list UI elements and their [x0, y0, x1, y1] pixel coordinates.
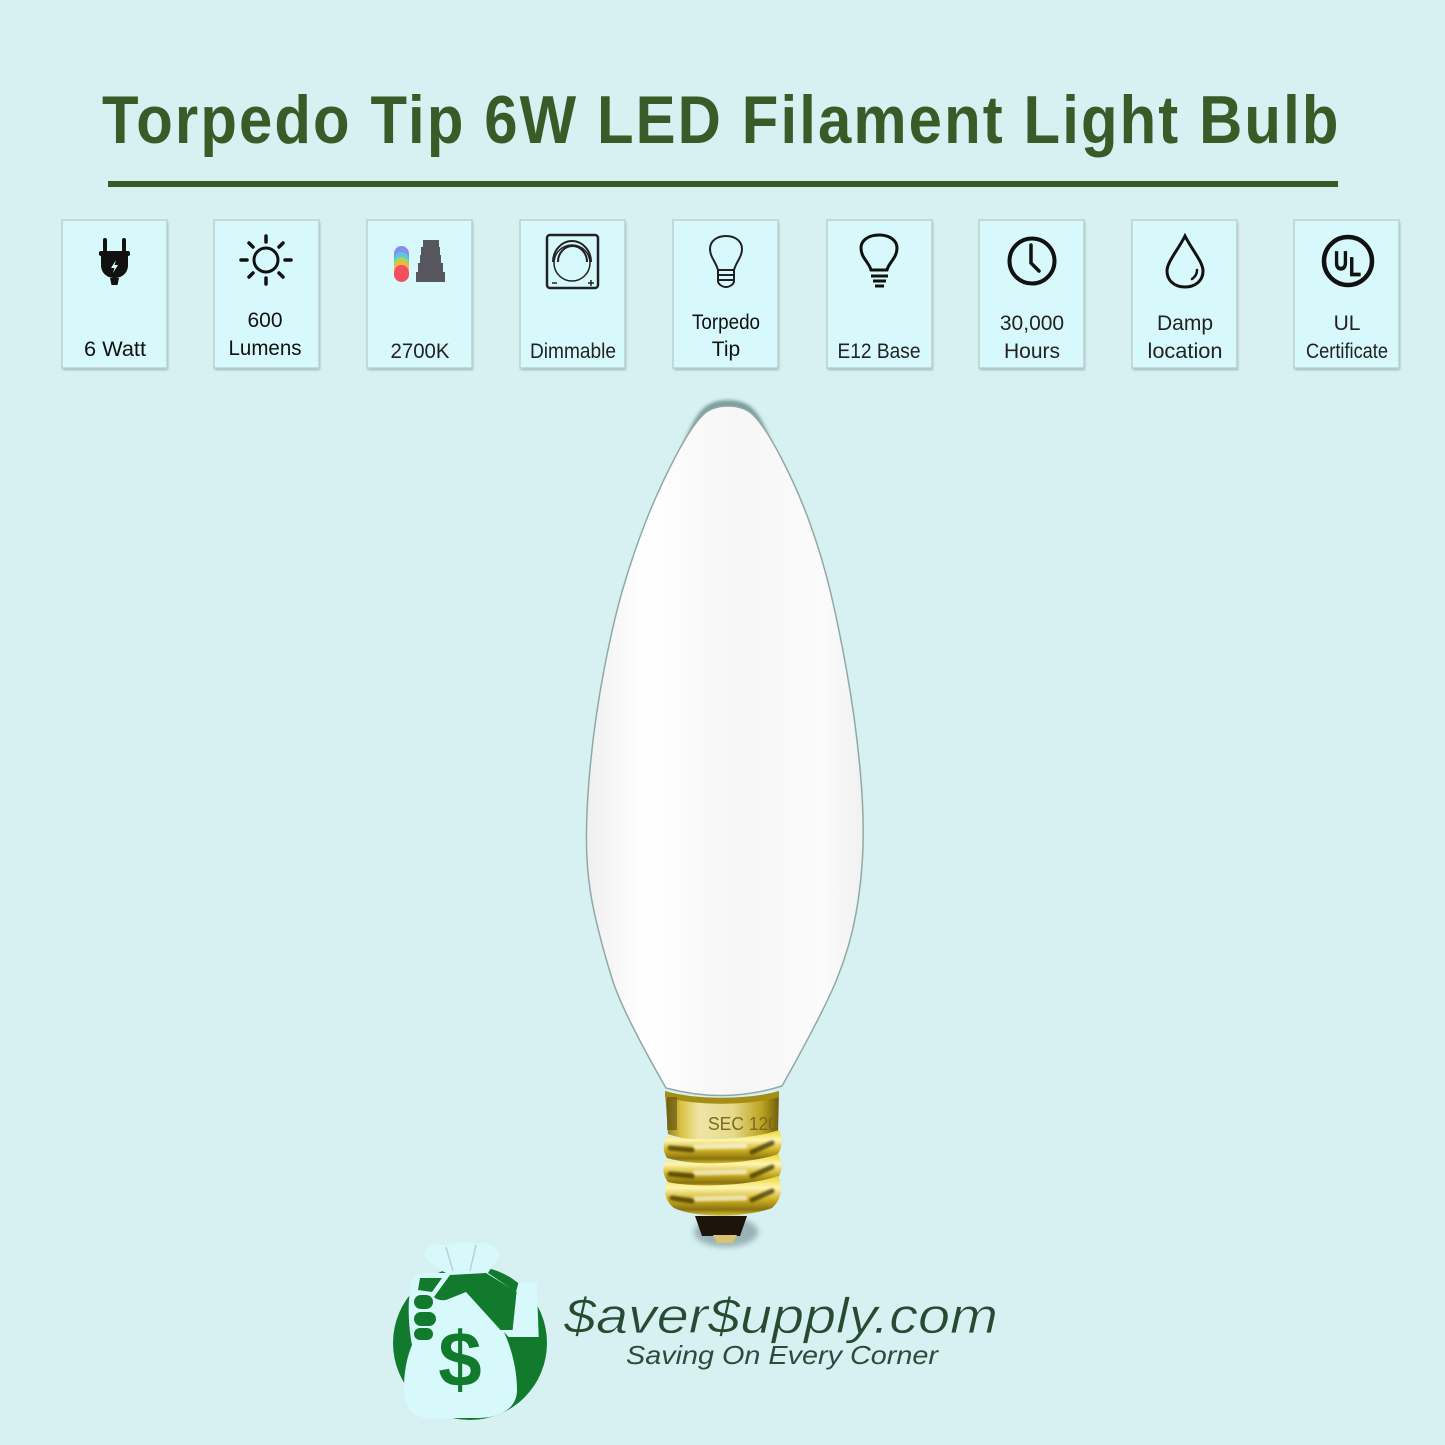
spec card: Damp location: [1132, 220, 1238, 370]
spec card: 2700K: 2700K: [390, 340, 450, 363]
contact tip: [713, 1235, 737, 1243]
spec card: 30,000 Hours: 30,000: [1000, 312, 1064, 335]
icon: clock: [1010, 238, 1054, 284]
spec card: 600 Lumens: Lumens: [228, 337, 302, 360]
icon: dimmer dial: [547, 235, 598, 288]
logo: money bag emblem: [393, 1242, 547, 1420]
logo: wordmark: $aver$upply.com: [563, 1288, 998, 1344]
spec card: 2700K: [367, 220, 473, 370]
spec card: 600 Lumens: 600: [247, 309, 283, 332]
bulb glass: [586, 406, 863, 1096]
icon: UL mark: [1324, 237, 1372, 285]
spec card: E12 Base: E12 Base: [838, 340, 920, 363]
icon: colour temperature: [394, 240, 445, 282]
icon: bulb: [861, 235, 897, 286]
contact: [695, 1216, 747, 1236]
bag opening: [434, 1273, 517, 1330]
spec card: 30,000 Hours: Hours: [1004, 340, 1060, 363]
money bag and knot: [404, 1242, 539, 1418]
logo: tagline: Saving On Every Corner: [626, 1340, 939, 1370]
knot folds: [446, 1245, 476, 1271]
collar stamp: SEC 120: [708, 1114, 778, 1134]
screw collar: [665, 1091, 779, 1142]
spec card: Torpedo Tip: [673, 220, 779, 370]
spec card: E12 Base: [827, 220, 933, 370]
icon: UL mark: L: [1349, 252, 1361, 282]
bulb top halo: [683, 400, 772, 446]
spec card: 30,000 Hours: [979, 220, 1085, 370]
dollar sign: $: [438, 1315, 482, 1403]
spec card: Torpedo Tip: Torpedo: [692, 311, 760, 334]
green circle: [393, 1266, 547, 1420]
spec card: 6 Watt: [62, 220, 168, 370]
spec card: Dimmable: Dimmable: [530, 340, 616, 363]
title underline: [108, 181, 1338, 187]
icon: sun: [241, 236, 291, 284]
title: Torpedo Tip 6W LED Filament Light Bulb: [102, 81, 1338, 158]
icon: UL mark: U: [1334, 246, 1348, 276]
spec card: 6 Watt: 6 Watt: [84, 338, 146, 361]
screw threads: [663, 1130, 782, 1216]
fingers: [414, 1278, 442, 1340]
light bulb: [586, 400, 863, 1247]
icon: torpedo bulb: [710, 236, 742, 287]
bulb shadow: [694, 1217, 758, 1247]
spec card: UL Certificate: Certificate: [1306, 340, 1388, 363]
spec card: Dimmable: [520, 220, 626, 370]
spec card: Damp location: location: [1148, 340, 1222, 363]
spec card: Damp location: Damp: [1157, 312, 1213, 335]
spec card: UL Certificate: [1294, 220, 1400, 370]
spec card: UL Certificate: UL: [1334, 312, 1360, 335]
icon: water drop: [1167, 236, 1203, 287]
spec card: Torpedo Tip: Tip: [712, 338, 740, 361]
spec card: 600 Lumens: [214, 220, 320, 370]
icon: plug: [99, 238, 130, 285]
